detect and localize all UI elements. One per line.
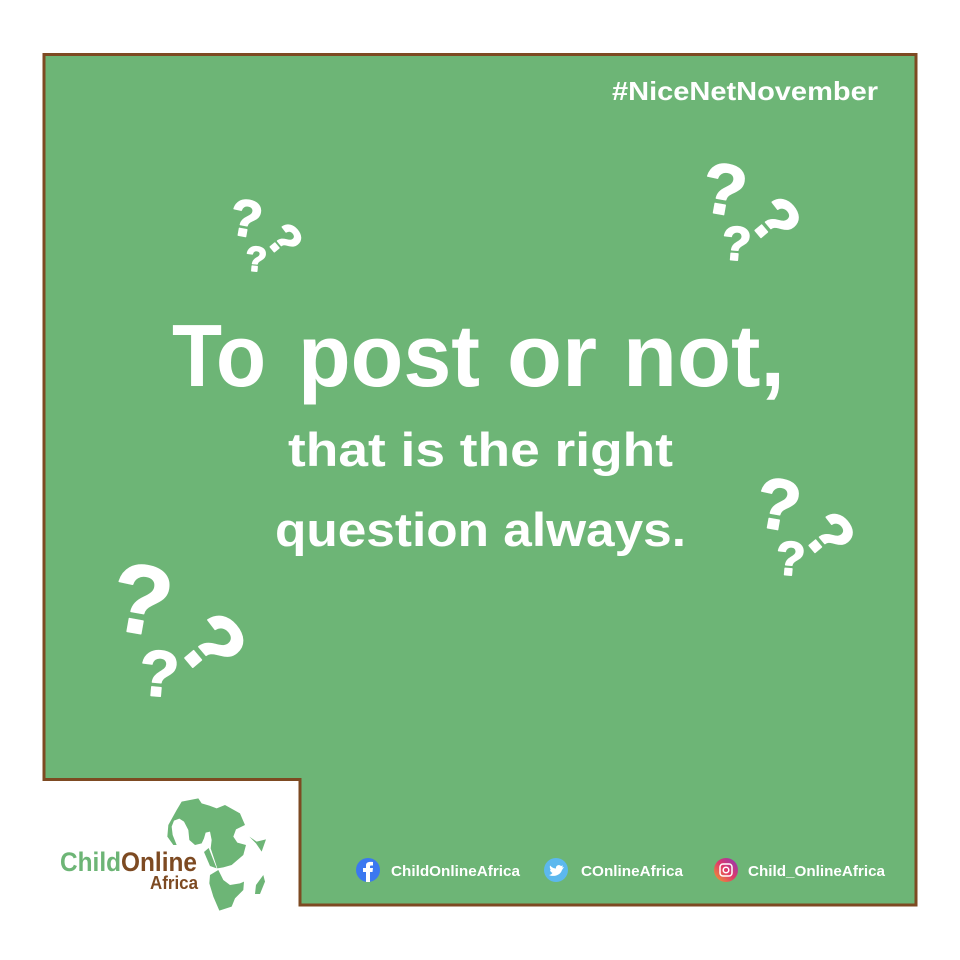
- hashtag: #NiceNetNovember: [612, 76, 878, 106]
- subtitle: [275, 423, 686, 556]
- icon: question marks top right: ?: [736, 183, 816, 259]
- icon: question marks top left: ?: [244, 239, 268, 280]
- icon: instagram: [714, 858, 738, 882]
- title: post: [298, 306, 480, 405]
- facebook handle: ChildOnlineAfrica: [391, 863, 521, 880]
- title: To: [172, 306, 266, 405]
- icon: question marks top right: [696, 147, 816, 272]
- title: not,: [623, 306, 785, 405]
- icon: question marks right: [750, 462, 870, 587]
- icon: question marks top left: ?: [257, 213, 313, 267]
- icon: question marks bottom left: ?: [159, 594, 266, 696]
- icon: twitter: [544, 858, 568, 882]
- icon: question marks right: ?: [790, 498, 870, 574]
- logo: Child Online Africa: [60, 798, 266, 911]
- icon: question marks right: ?: [750, 462, 807, 549]
- icon: question marks top left: [225, 188, 313, 280]
- icon: question marks top right: ?: [696, 147, 753, 234]
- subtitle: question always.: [275, 503, 686, 556]
- title: or: [507, 306, 597, 405]
- logo: Child Online Africa: Africa: [150, 873, 199, 893]
- icon: question marks top left: ?: [225, 188, 267, 251]
- logo wordmark: ChildOnline: [60, 847, 197, 877]
- icon: question marks bottom left: [103, 540, 266, 712]
- icon: Africa map: [167, 798, 266, 911]
- icon: facebook: [356, 858, 380, 882]
- subtitle: that is the right: [288, 423, 673, 476]
- instagram handle: Child_OnlineAfrica: [748, 863, 886, 880]
- twitter handle: COnlineAfrica: [581, 863, 684, 880]
- social links: [356, 858, 886, 882]
- icon: question marks right: ?: [773, 532, 807, 587]
- icon: question marks top right: ?: [719, 217, 753, 272]
- title: [172, 306, 785, 405]
- icon: question marks bottom left: ?: [103, 540, 181, 659]
- icon: question marks bottom left: ?: [136, 635, 182, 712]
